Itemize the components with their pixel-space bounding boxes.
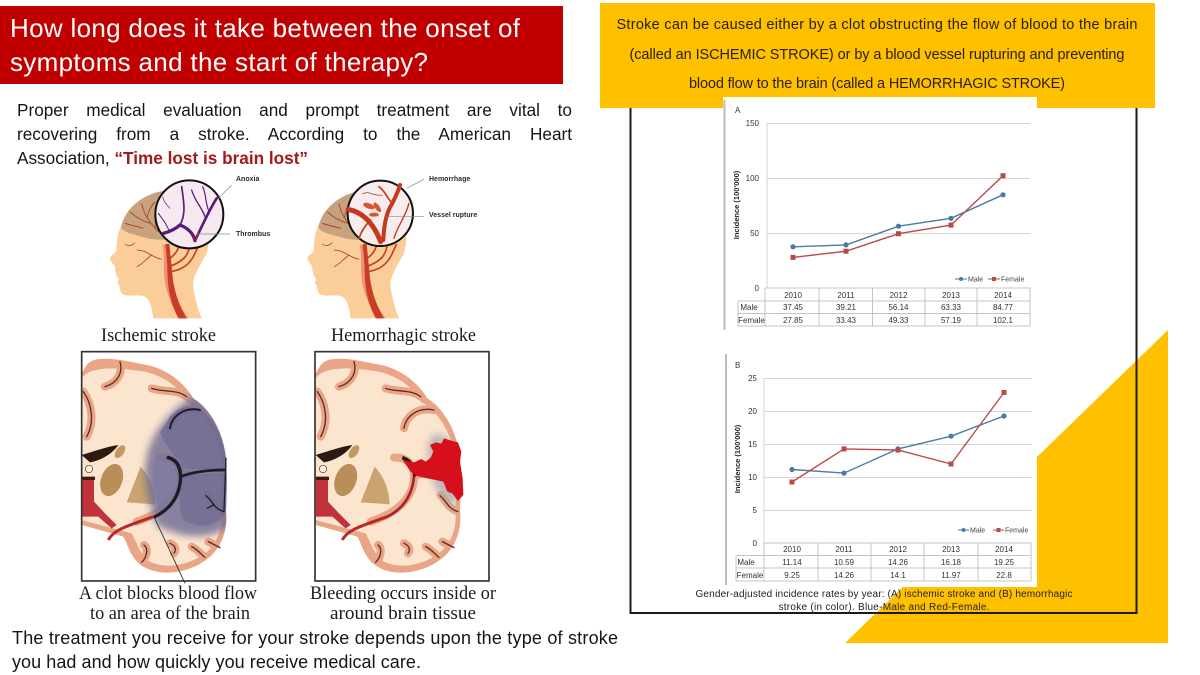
line chart B: hemorrhagic stroke: 15 bbox=[748, 440, 758, 449]
illustration: brain section with clot: A clot blocks blood flow bbox=[79, 584, 258, 604]
line chart B: hemorrhagic stroke: B bbox=[735, 361, 740, 370]
line chart A: ischemic stroke bbox=[723, 97, 1037, 330]
line chart A: ischemic stroke: 2014 bbox=[994, 291, 1012, 300]
caption: ischemic stroke: Ischemic stroke bbox=[101, 326, 216, 346]
line chart B: hemorrhagic stroke: 25 bbox=[748, 374, 758, 383]
line chart A: ischemic stroke: 57.19 bbox=[941, 316, 962, 325]
definition callout bbox=[600, 3, 1155, 108]
illustration: brain section with bleeding: Bleeding occurs inside or bbox=[310, 584, 496, 604]
closing text: The treatment you receive for your stroke depends upon the type of stroke bbox=[12, 628, 618, 648]
line chart A: ischemic stroke: 2013 bbox=[942, 291, 960, 300]
line chart B: hemorrhagic stroke: 2012 bbox=[889, 545, 907, 554]
definition callout: blood flow to the brain (called a HEMORRHAGIC STROKE) bbox=[689, 76, 1065, 92]
line chart A: ischemic stroke: 2011 bbox=[837, 291, 855, 300]
line chart A: ischemic stroke: 63.33 bbox=[941, 303, 962, 312]
line chart A: ischemic stroke: Male bbox=[740, 303, 758, 312]
definition callout: Stroke can be caused either by a clot obstructing the flow of blood to the brain bbox=[616, 17, 1138, 33]
line chart B: hemorrhagic stroke: 0 bbox=[753, 539, 758, 548]
intro text: recovering from a stroke. According to the American Heart bbox=[17, 124, 572, 144]
illustration: brain section with bleeding: around brain tissue bbox=[330, 604, 476, 624]
line chart B: hemorrhagic stroke: 20 bbox=[748, 407, 758, 416]
closing text: you had and how quickly you receive medical care. bbox=[12, 652, 421, 672]
line chart B: hemorrhagic stroke: 2014 bbox=[995, 545, 1013, 554]
line chart B: hemorrhagic stroke: 2010 bbox=[783, 545, 801, 554]
line chart B: hemorrhagic stroke: 11.97 bbox=[941, 571, 961, 580]
line chart A: ischemic stroke: 37.45 bbox=[783, 303, 804, 312]
caption: hemorrhagic stroke: Hemorrhagic stroke bbox=[331, 326, 476, 346]
intro text bbox=[17, 100, 572, 168]
line chart B: hemorrhagic stroke: 10 bbox=[748, 473, 758, 482]
line chart A: ischemic stroke: Incidence (100'000) bbox=[732, 170, 741, 239]
line chart A: ischemic stroke: 150 bbox=[746, 119, 760, 128]
line chart A: ischemic stroke: 84.77 bbox=[993, 303, 1014, 312]
line chart B: hemorrhagic stroke bbox=[725, 353, 1037, 587]
line chart B: hemorrhagic stroke: 14.26 bbox=[834, 571, 855, 580]
line chart A: ischemic stroke: 100 bbox=[746, 174, 760, 183]
chart caption bbox=[696, 589, 1072, 613]
line chart A: ischemic stroke: 49.33 bbox=[888, 316, 909, 325]
line chart A: ischemic stroke: A bbox=[735, 106, 741, 115]
closing text bbox=[12, 628, 618, 672]
illustration: brain section with clot bbox=[79, 352, 258, 624]
chart caption: Gender-adjusted incidence rates by year: (A) ischemic stroke and (B) hemorrhagic bbox=[696, 589, 1072, 600]
line chart A: ischemic stroke: 27.85 bbox=[783, 316, 804, 325]
line chart B: hemorrhagic stroke: 19.25 bbox=[994, 558, 1015, 567]
line chart A: ischemic stroke: 102.1 bbox=[993, 316, 1014, 325]
illustration: ischemic stroke head: Anoxia bbox=[236, 176, 259, 183]
definition callout: (called an ISCHEMIC STROKE) or by a blood vessel rupturing and preventing bbox=[630, 47, 1124, 63]
line chart B: hemorrhagic stroke: Female bbox=[1005, 528, 1028, 534]
line chart A: ischemic stroke: 33.43 bbox=[836, 316, 857, 325]
yellow corner triangle bbox=[845, 330, 1168, 643]
line chart B: hemorrhagic stroke: 2011 bbox=[835, 545, 853, 554]
title banner: symptoms and the start of therapy? bbox=[10, 47, 428, 77]
line chart B: hemorrhagic stroke: Female bbox=[737, 571, 764, 580]
line chart B: hemorrhagic stroke: 16.18 bbox=[941, 558, 962, 567]
illustration: ischemic stroke head: Thrombus bbox=[236, 231, 270, 238]
line chart B: hemorrhagic stroke: 14.26 bbox=[888, 558, 909, 567]
line chart A: ischemic stroke: 50 bbox=[750, 229, 760, 238]
line chart A: ischemic stroke: Male bbox=[968, 276, 983, 284]
intro text: Proper medical evaluation and prompt treatment are vital to bbox=[17, 100, 572, 120]
illustration: hemorrhagic stroke head: Hemorrhage bbox=[429, 176, 470, 183]
illustration: brain section with clot: to an area of the brain bbox=[90, 604, 250, 624]
line chart A: ischemic stroke: 0 bbox=[755, 284, 760, 293]
illustration: hemorrhagic stroke head: Vessel rupture bbox=[429, 212, 477, 219]
line chart A: ischemic stroke: Female bbox=[738, 316, 765, 325]
intro text: Association, “Time lost is brain lost” bbox=[17, 148, 308, 168]
line chart B: hemorrhagic stroke: Male bbox=[737, 558, 755, 567]
line chart B: hemorrhagic stroke: 9.25 bbox=[784, 571, 800, 580]
line chart B: hemorrhagic stroke: 2013 bbox=[942, 545, 960, 554]
line chart B: hemorrhagic stroke: 5 bbox=[753, 506, 758, 515]
chart caption: stroke (in color). Blue-Male and Red-Female. bbox=[778, 602, 990, 613]
line chart A: ischemic stroke: Female bbox=[1001, 276, 1024, 284]
illustration: ischemic stroke head bbox=[110, 176, 270, 318]
line chart A: ischemic stroke: 39.21 bbox=[836, 303, 857, 312]
illustration: brain section with bleeding bbox=[310, 352, 496, 624]
chart frame bbox=[630, 90, 1136, 613]
title banner bbox=[0, 6, 563, 84]
line chart B: hemorrhagic stroke: 14.1 bbox=[890, 571, 906, 580]
line chart B: hemorrhagic stroke: Male bbox=[970, 528, 985, 534]
line chart B: hemorrhagic stroke: 11.14 bbox=[782, 558, 802, 567]
line chart A: ischemic stroke: 2010 bbox=[784, 291, 802, 300]
line chart B: hemorrhagic stroke: 10.59 bbox=[834, 558, 855, 567]
line chart B: hemorrhagic stroke: Incidence (100'000) bbox=[733, 424, 742, 493]
illustration: hemorrhagic stroke head bbox=[307, 176, 477, 318]
line chart B: hemorrhagic stroke: 22.8 bbox=[996, 571, 1012, 580]
title banner: How long does it take between the onset of bbox=[10, 13, 521, 43]
line chart A: ischemic stroke: 2012 bbox=[890, 291, 908, 300]
line chart A: ischemic stroke: 56.14 bbox=[888, 303, 909, 312]
